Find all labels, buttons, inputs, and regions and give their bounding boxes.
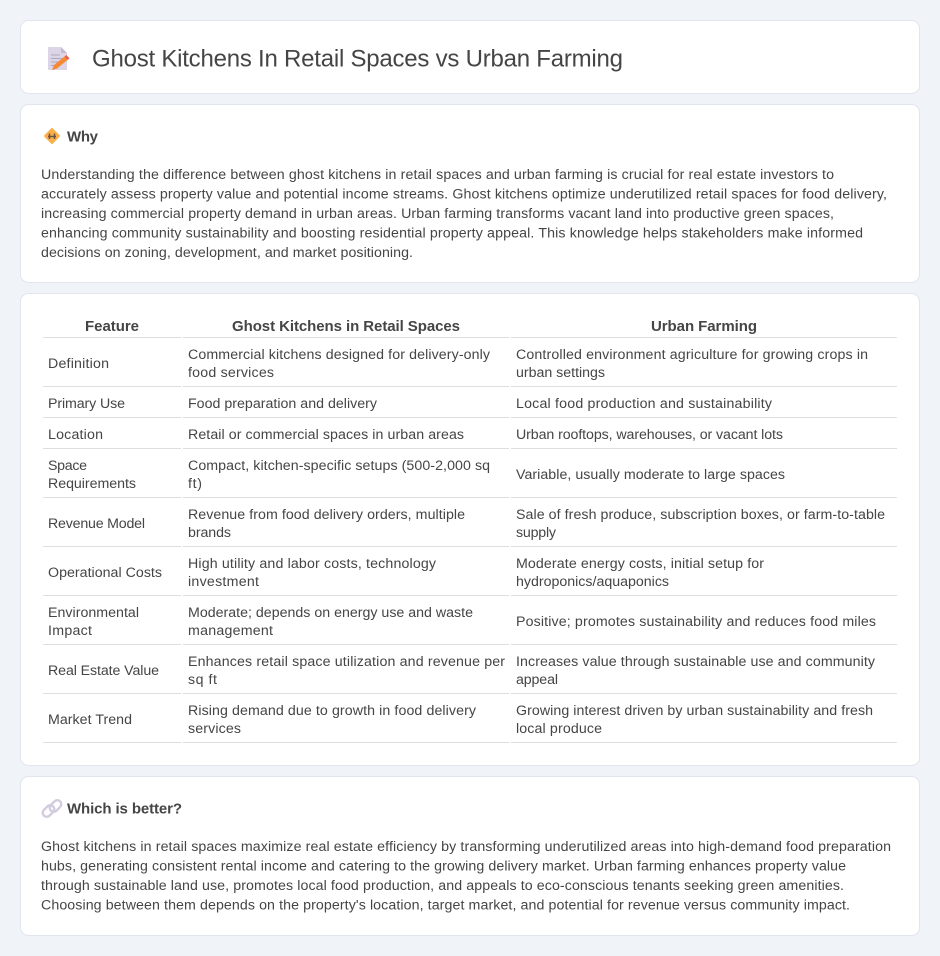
row: primary use: Food preparation and delivery xyxy=(188,396,378,412)
row: operational costs: High utility and labor costs, technology xyxy=(188,556,437,572)
row: primary use: Local food production and sustainability xyxy=(516,396,773,412)
row: definition: urban settings xyxy=(516,365,605,381)
text block: why paragraph: enhancing community sustainability and boosting residential property appeal. This knowledge helps stakeholders make informed xyxy=(41,226,863,242)
row: real estate value: appeal xyxy=(516,672,558,688)
text block: which is better paragraph: hubs, generating consistent rental income and catering to the growing delivery market. Urban farming enhances property value xyxy=(41,858,846,874)
row: real estate value: sq ft xyxy=(188,672,217,688)
row: real estate value xyxy=(48,654,876,688)
row: operational costs: hydroponics/aquaponics xyxy=(516,574,669,590)
row: space requirements: Requirements xyxy=(48,476,136,492)
panel: why xyxy=(20,104,920,282)
row: primary use: Primary Use xyxy=(48,396,125,412)
row: environmental impact: Environmental xyxy=(48,605,139,621)
row: definition: Definition xyxy=(48,356,109,372)
row: operational costs: investment xyxy=(188,574,259,590)
row: market trend: Rising demand due to growth in food delivery xyxy=(188,703,477,719)
text block: why paragraph xyxy=(41,167,887,261)
row: market trend: local produce xyxy=(516,721,602,737)
text block: which is better paragraph: Choosing between them depends on the property's location, target market, and potential for revenue versus community impact. xyxy=(41,898,850,914)
row: real estate value: Real Estate Value xyxy=(48,663,159,679)
row: revenue model: Revenue Model xyxy=(48,516,145,532)
text block: why paragraph: decisions on zoning, development, and market positioning. xyxy=(41,245,413,261)
row: location: Urban rooftops, warehouses, or vacant lots xyxy=(516,427,783,443)
row: environmental impact xyxy=(48,605,876,639)
row: location xyxy=(48,427,783,443)
row: primary use xyxy=(48,396,773,412)
row: real estate value: Increases value through sustainable use and community xyxy=(516,654,876,670)
row: operational costs: Moderate energy costs, initial setup for xyxy=(516,556,764,572)
heading: why: Why xyxy=(67,128,99,146)
row: definition: food services xyxy=(188,365,274,381)
text block: why paragraph: increasing commercial property demand in urban areas. Urban farming transforms vacant land into productive green spaces, xyxy=(41,206,834,222)
panel: comparison table xyxy=(20,294,920,766)
row: market trend: services xyxy=(188,721,241,737)
row: definition: Controlled environment agriculture for growing crops in xyxy=(516,347,868,363)
row: operational costs: Operational Costs xyxy=(48,565,162,581)
heading: which is better: Which is better? xyxy=(67,800,182,818)
row: definition: Commercial kitchens designed for delivery-only xyxy=(188,347,491,363)
text block: why paragraph: accurately assess property value and potential income streams. Ghost kitchens optimize underutilized retail spaces for food delivery, xyxy=(41,186,887,202)
row: revenue model xyxy=(48,507,885,541)
text block: which is better paragraph: Ghost kitchens in retail spaces maximize real estate efficiency by transforming underutilized areas into high-demand food preparation xyxy=(41,839,891,855)
icon: chain link xyxy=(41,799,63,818)
table header row xyxy=(85,318,757,335)
row: market trend: Market Trend xyxy=(48,712,132,728)
row: revenue model: supply xyxy=(516,525,557,541)
icon: document with pencil xyxy=(48,47,70,70)
row: environmental impact: Impact xyxy=(48,623,92,639)
row: real estate value: Enhances retail space utilization and revenue per xyxy=(188,654,505,670)
row: environmental impact: Moderate; depends on energy use and waste xyxy=(188,605,473,621)
row: space requirements xyxy=(48,458,785,492)
row: space requirements: Compact, kitchen-specific setups (500-2,000 sq xyxy=(188,458,490,474)
table header row: Feature xyxy=(85,318,139,335)
row: location: Location xyxy=(48,427,103,443)
table header row: Ghost Kitchens in Retail Spaces xyxy=(232,318,460,335)
panel: title header xyxy=(20,20,920,94)
row: space requirements: Variable, usually moderate to large spaces xyxy=(516,467,785,483)
text block: why paragraph: Understanding the difference between ghost kitchens in retail spaces and urban farming is crucial for real estate investors to xyxy=(41,167,834,183)
panel: which is better xyxy=(20,776,920,936)
table header row: Urban Farming xyxy=(651,318,757,335)
text block: which is better paragraph: through sustainable land use, promotes local food production, and appeals to eco-conscious tenants seeking green amenities. xyxy=(41,878,844,894)
row: revenue model: brands xyxy=(188,525,231,541)
row: environmental impact: Positive; promotes sustainability and reduces food miles xyxy=(516,614,876,630)
title: Ghost Kitchens In Retail Spaces vs Urban Farming xyxy=(92,46,623,72)
row: location: Retail or commercial spaces in urban areas xyxy=(188,427,464,443)
row: revenue model: Revenue from food delivery orders, multiple xyxy=(188,507,465,523)
text block: which is better paragraph xyxy=(41,839,891,914)
row: revenue model: Sale of fresh produce, subscription boxes, or farm-to-table xyxy=(516,507,885,523)
row: market trend: Growing interest driven by urban sustainability and fresh xyxy=(516,703,873,719)
row: definition xyxy=(48,347,868,381)
row: environmental impact: management xyxy=(188,623,273,639)
row: operational costs xyxy=(48,556,764,590)
row: space requirements: ft) xyxy=(188,476,202,492)
row: market trend xyxy=(48,703,873,737)
row: space requirements: Space xyxy=(48,458,87,474)
icon: warning diamond xyxy=(45,129,59,143)
